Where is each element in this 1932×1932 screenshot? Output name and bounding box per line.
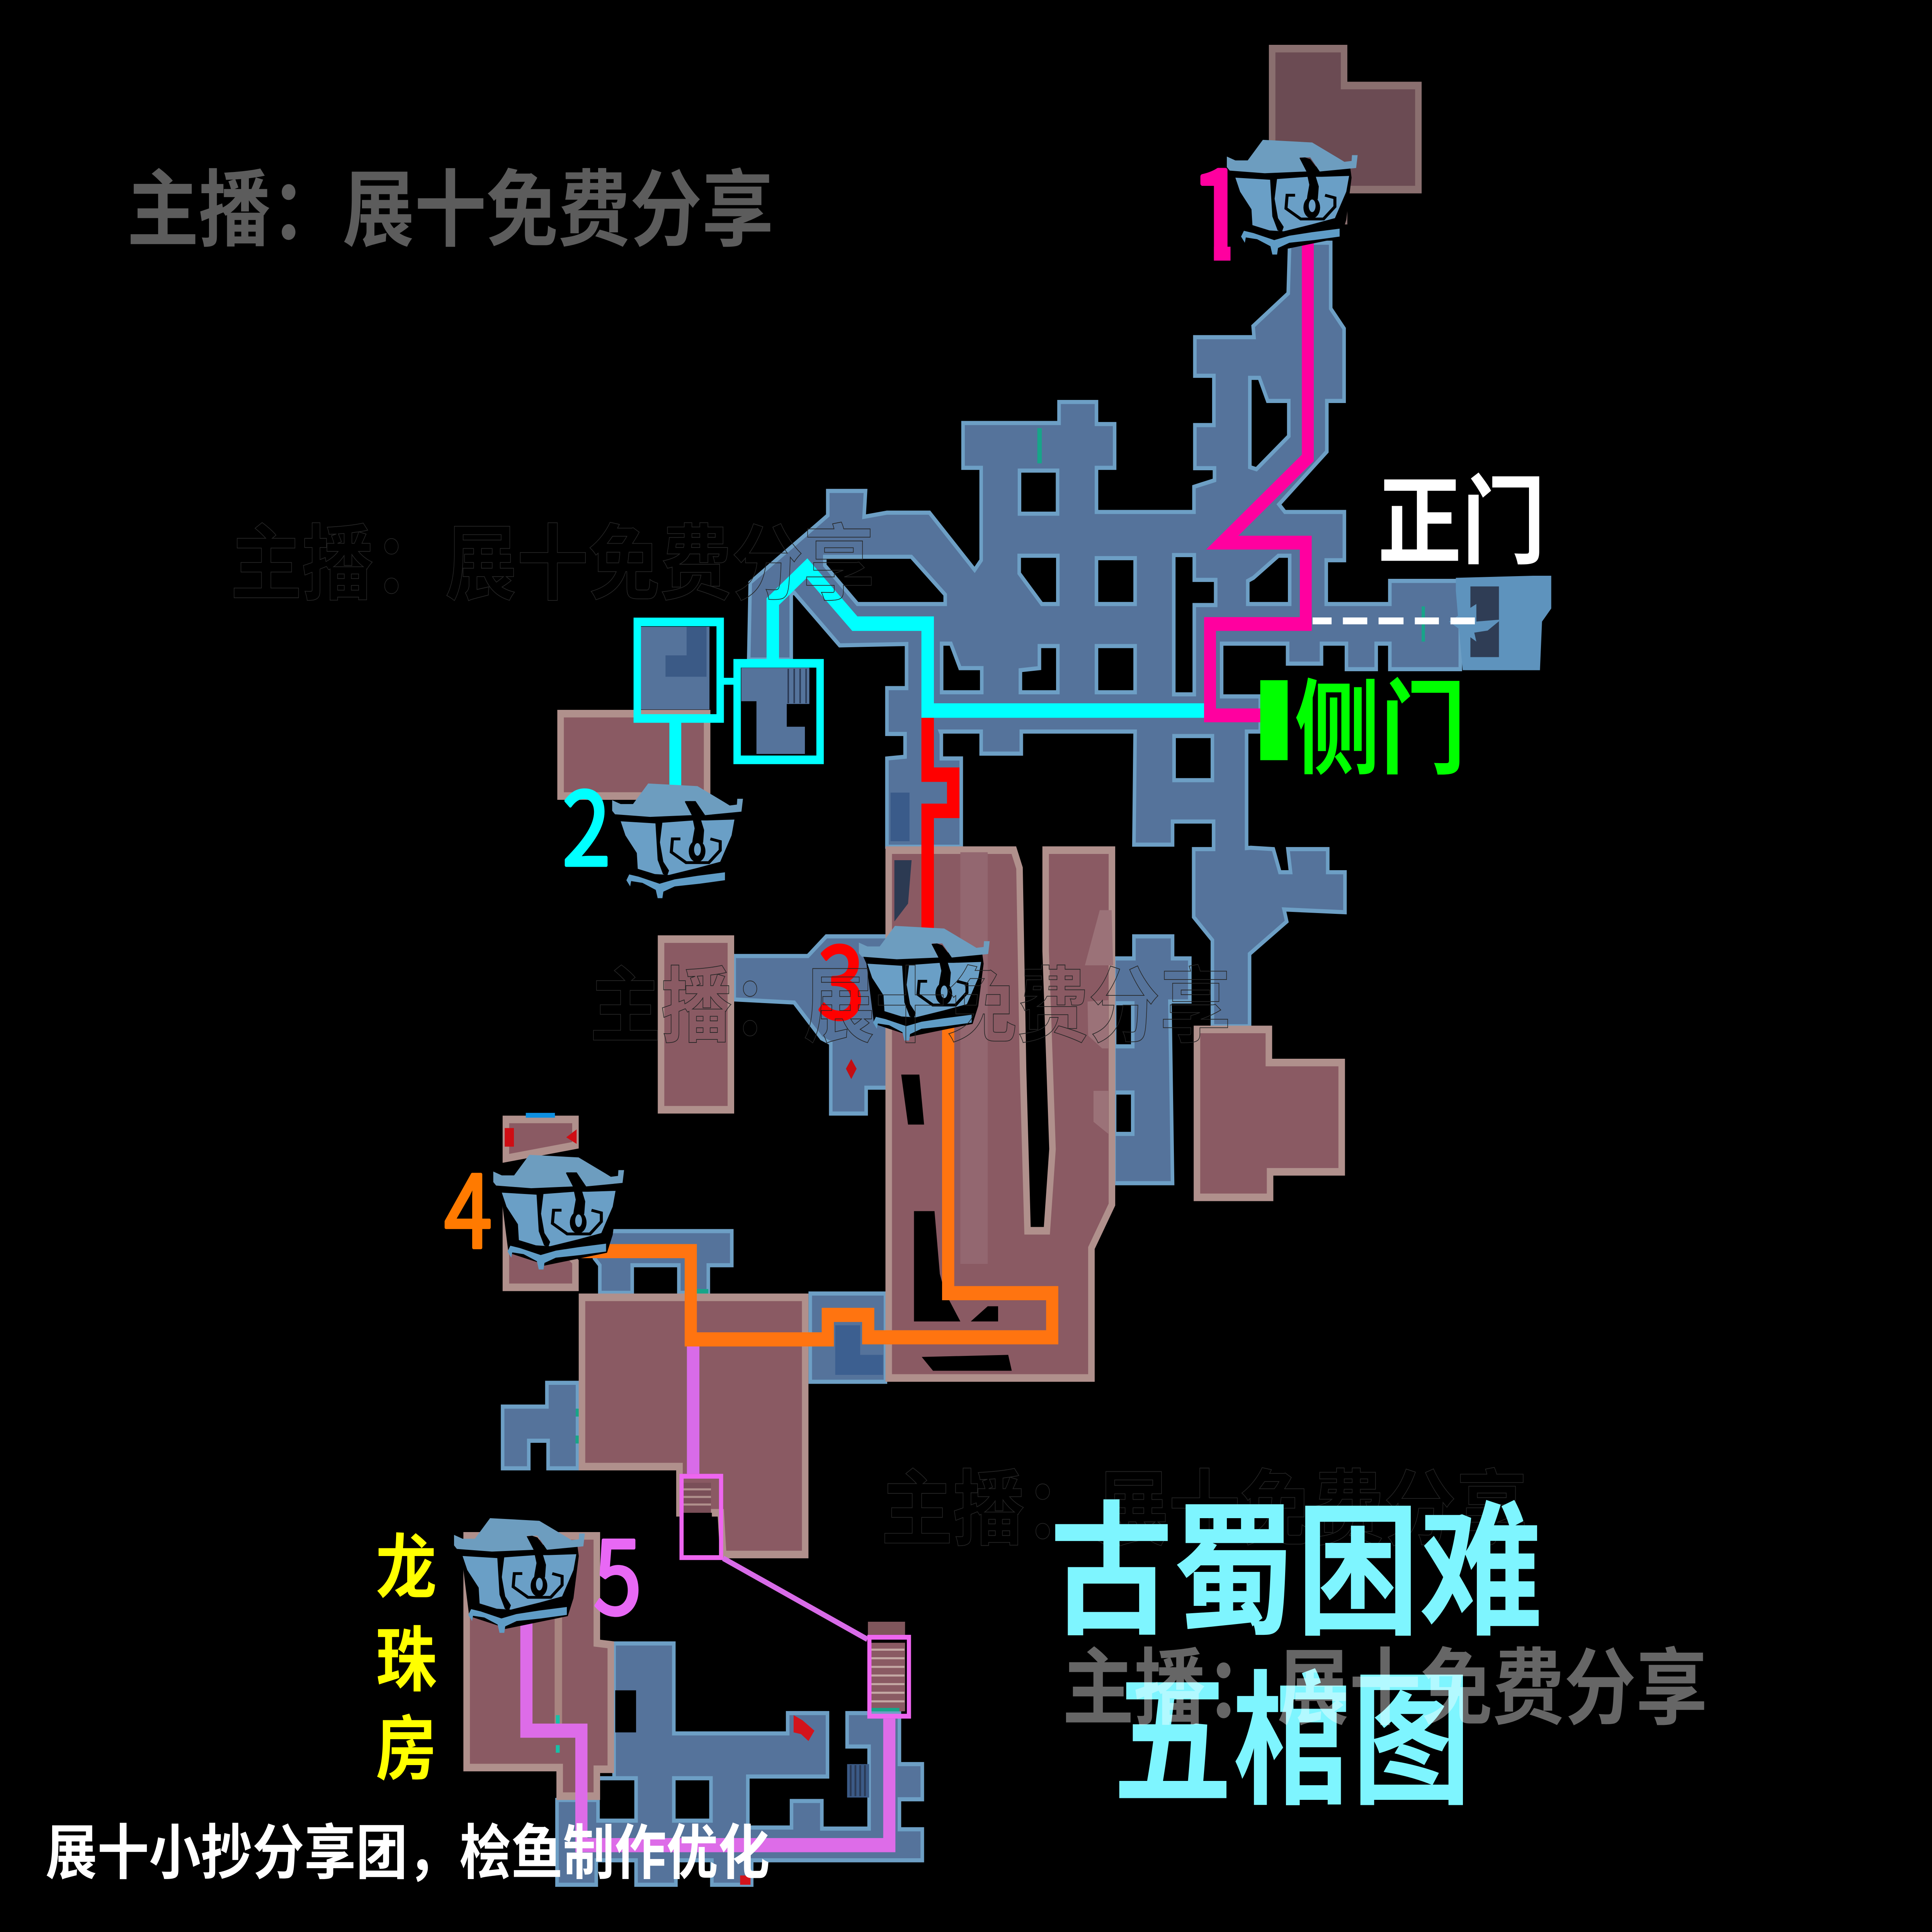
side door marker [1260,680,1287,760]
route 2: cyan path [637,568,1204,789]
chest icon 4 [493,1155,624,1269]
main gate door [1449,576,1551,670]
outlined watermark upper left: 主播：展十免费分享 [230,519,875,611]
label: dragon orb room: 龙 [376,1529,437,1608]
number 4: 4 [444,1132,492,1277]
label: main gate: 正门 [1378,468,1546,577]
number 5: 5 [594,1497,642,1643]
number 3: 3 [817,905,864,1047]
stair room under magenta box 2 [868,1622,905,1711]
grey watermark over title: 主播：展十免费分享 [1062,1642,1708,1735]
map floor plan [467,49,1551,1885]
blue room inside cyan box 2 [741,668,810,754]
title line 1: 古蜀困难 [1050,1492,1543,1653]
outlined watermark lower: 主播：展十免费分享 [881,1464,1528,1556]
blue side block right of big hall [1114,936,1190,1183]
red room: dragon orb room [467,1536,636,1796]
blue lower corridors [557,1643,922,1885]
blue room inside cyan box 1 [641,627,709,709]
white dashed entrance path [1313,617,1475,625]
label: dragon orb room [376,1529,437,1789]
blue small west block [503,1383,582,1468]
number 2: 2 [562,748,611,895]
number 1: 1 [1190,119,1247,293]
route 3: red path [928,710,953,931]
red hall: top building [1272,49,1418,221]
blue corridors: main building [749,243,1460,1026]
credit line: 展十小抄分享团，桧鱼制作优化 [46,1820,770,1886]
route 1: pink path [1210,243,1308,715]
label: dragon orb room: 珠 [376,1621,437,1701]
route 5: magenta path to dragon orb room [526,1343,909,1845]
red hall: left of chest 2 [561,714,707,796]
label: side gate: 侧门 [1294,672,1466,787]
route 4: orange path [580,1025,1052,1339]
red hall: big central hall [889,850,1113,1378]
blue T block by chest 4 [594,1231,732,1295]
label: dragon orb room: 房 [376,1710,437,1789]
red hall: large southwest hall [582,1297,805,1554]
red room at chest 4 [505,1113,577,1287]
chest icon 2 [612,784,743,898]
blue stair room between halls [810,1294,886,1382]
chest icon 5 [454,1518,585,1633]
red hall: narrow west room [661,939,731,1110]
outlined watermark middle: 主播：展十免费分享 [590,961,1231,1053]
red hall: right lower building [1197,1029,1342,1197]
grey watermark top left: 主播：展十免费分享 [127,163,774,257]
chest icon 3 [859,926,990,1041]
title line 2: 五棺图 [1113,1661,1471,1823]
blue room near chest 3 [734,936,887,1114]
chest icon 1 [1227,140,1358,255]
